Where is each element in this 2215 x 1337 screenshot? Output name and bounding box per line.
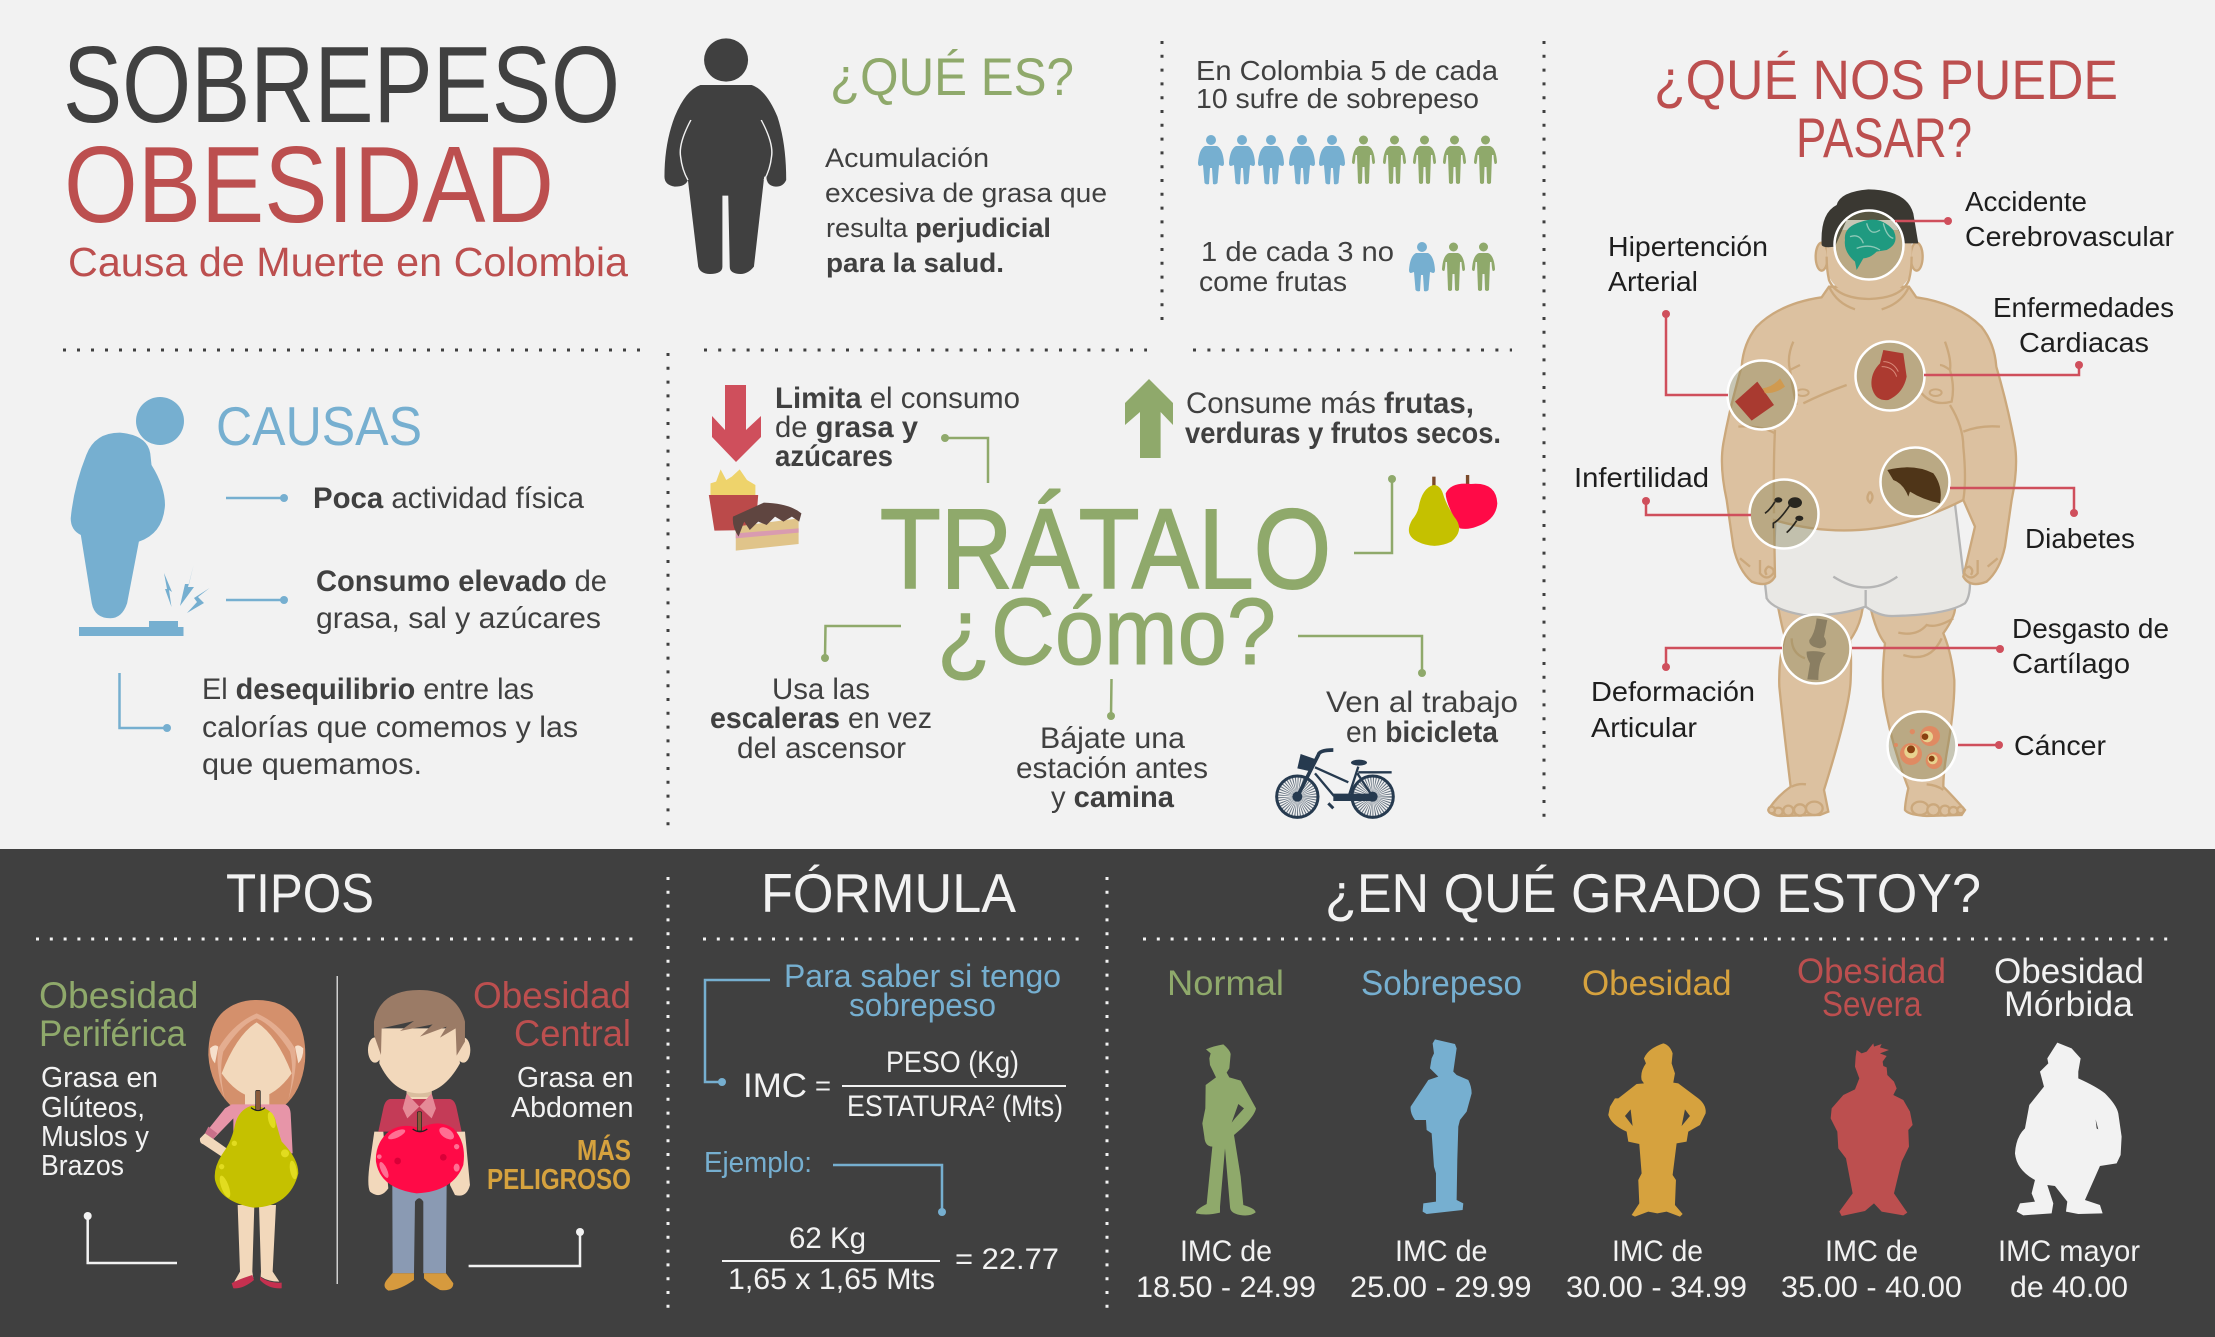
panel: formula: =: [815, 1070, 831, 1101]
panel: tratalo: y camina: [1051, 781, 1174, 814]
panel: formula: [704, 862, 1066, 1296]
lens: heart: [1856, 342, 1924, 410]
panel: tratalo: estación antes: [1016, 752, 1208, 785]
panel: formula: FÓRMULA: [761, 862, 1016, 924]
panel: tratalo: Usa las: [772, 673, 870, 706]
background: lower dark panel: [0, 849, 2215, 1337]
grade: obesidad: IMC de: [1612, 1235, 1703, 1268]
panel: causas: El desequilibrio entre las: [202, 673, 534, 706]
labels: conditions: Cerebrovascular: [1965, 221, 2174, 252]
panel: que nos puede pasar: ¿QUÉ NOS PUEDE: [1654, 48, 2118, 111]
labels: conditions: Enfermedades: [1993, 292, 2174, 323]
body figure: [1722, 189, 2016, 816]
panel: formula: Para saber si tengo: [784, 958, 1061, 994]
connectors: [821, 434, 1426, 720]
labels: conditions: Cáncer: [2014, 730, 2106, 761]
panel: formula: IMC: [743, 1067, 807, 1105]
panel: tipos: MÁS: [577, 1133, 631, 1167]
panel: tipos: Glúteos,: [41, 1092, 145, 1124]
panel: tipos: Grasa en: [41, 1062, 158, 1094]
icon: overweight person: [664, 38, 786, 274]
grade: normal: [1136, 964, 1316, 1304]
icon: fries and cake: [709, 469, 801, 551]
panel: statistics: 10 sufre de sobrepeso: [1196, 83, 1479, 114]
panel: tipos: TIPOS: [226, 862, 374, 924]
connectors: tipos: [84, 1212, 584, 1266]
grade: obesidad morbida: Mórbida: [2004, 985, 2134, 1024]
lens: liver: [1880, 448, 1950, 516]
grade: sobrepeso: 25.00 - 29.99: [1350, 1271, 1532, 1304]
panel: tipos: [39, 862, 634, 1291]
grade: obesidad: 30.00 - 34.99: [1566, 1271, 1747, 1304]
panel: tratalo: del ascensor: [737, 732, 906, 765]
panel: causas: CAUSAS: [216, 395, 422, 457]
panel: tipos: Periférica: [39, 1013, 186, 1054]
icon: woman with pear: [200, 1000, 305, 1288]
panel: tipos: PELIGROSO: [487, 1164, 631, 1196]
panel: tratalo: en bicicleta: [1346, 716, 1498, 749]
labels: conditions: Desgasto de: [2012, 613, 2169, 644]
panel: que es: resulta perjudicial: [826, 213, 1051, 243]
connectors: conditions: [1642, 217, 2083, 749]
panel: que es: excesiva de grasa que: [825, 178, 1107, 208]
panel: statistics: En Colombia 5 de cada: [1196, 55, 1498, 86]
title: Causa de Muerte en Colombia: [68, 239, 628, 285]
panel: tratalo: de grasa y: [775, 411, 918, 444]
lens: artery: [1728, 360, 1796, 430]
labels: conditions: Infertilidad: [1574, 462, 1709, 493]
panel: formula: 62 Kg: [789, 1222, 866, 1255]
panel: que nos puede pasar: PASAR?: [1796, 106, 1972, 169]
panel: que es: [825, 48, 1107, 278]
icon: pear and apple: [1409, 475, 1497, 546]
panel: tratalo: Consume más frutas,: [1186, 387, 1474, 420]
grade: normal: Normal: [1167, 964, 1284, 1003]
panel: statistics: [1196, 55, 1498, 297]
grade: obesidad morbida: Obesidad: [1994, 952, 2144, 991]
labels: conditions: Diabetes: [2025, 523, 2135, 554]
labels: conditions: Arterial: [1608, 266, 1698, 297]
grade: obesidad severa: IMC de: [1825, 1235, 1918, 1268]
icon: bicycle: [1277, 750, 1393, 817]
panel: formula: Ejemplo:: [704, 1147, 812, 1179]
panel: tipos: Central: [514, 1013, 631, 1054]
labels: conditions: Hipertención: [1608, 231, 1768, 262]
panel: tipos: Obesidad: [473, 975, 631, 1016]
lens: knee: [1782, 614, 1850, 684]
grade: obesidad: [1566, 964, 1747, 1304]
panel: formula: = 22.77: [955, 1243, 1059, 1276]
grade: obesidad severa: Obesidad: [1797, 952, 1946, 991]
panel: tratalo: Ven al trabajo: [1326, 686, 1518, 719]
labels: conditions: [1574, 186, 2174, 761]
grade: sobrepeso: Sobrepeso: [1361, 964, 1522, 1003]
panel: tipos: Obesidad: [39, 975, 198, 1016]
grade: obesidad morbida: [1994, 952, 2144, 1304]
lens: cancer: [1888, 712, 1956, 780]
panel: que nos puede pasar: [1574, 48, 2174, 816]
panel: en que grado estoy: [1136, 862, 2144, 1304]
panel: statistics: come frutas: [1199, 266, 1347, 297]
panel: formula: sobrepeso: [849, 987, 996, 1023]
panel: que es: Acumulación: [825, 143, 989, 173]
arrow: reduce: [712, 385, 761, 462]
panel: formula: 1,65 x 1,65 Mts: [728, 1263, 935, 1296]
labels: conditions: Articular: [1591, 712, 1697, 743]
panel: tratalo: TRÁTALO: [880, 486, 1331, 612]
panel: que es: para la salud.: [826, 248, 1004, 278]
grade: obesidad severa: Severa: [1822, 985, 1922, 1024]
panel: en que grado estoy: ¿EN QUÉ GRADO ESTOY?: [1325, 862, 1981, 924]
background: upper light panel: [0, 0, 2215, 849]
panel: formula: ESTATURA² (Mts): [847, 1090, 1063, 1123]
panel: tipos: Muslos y: [41, 1121, 149, 1153]
labels: conditions: Deformación: [1591, 676, 1755, 707]
panel: tratalo: Limita el consumo: [775, 382, 1020, 415]
grade: normal: 18.50 - 24.99: [1136, 1271, 1316, 1304]
panel: statistics: 1 de cada 3 no: [1201, 236, 1394, 267]
grade: obesidad: Obesidad: [1582, 964, 1732, 1003]
panel: formula: PESO (Kg): [886, 1046, 1019, 1079]
panel: causas: grasa, sal y azúcares: [316, 602, 601, 635]
connector: formula: [705, 980, 946, 1216]
panel: tipos: Brazos: [41, 1150, 124, 1182]
labels: conditions: Cartílago: [2012, 648, 2130, 679]
panel: causas: calorías que comemos y las: [202, 711, 578, 744]
panel: tratalo: Bájate una: [1040, 722, 1185, 755]
panel: tratalo: [709, 379, 1518, 817]
panel: causas: Poca actividad física: [313, 482, 584, 515]
panel: tipos: Grasa en: [517, 1062, 634, 1094]
arrow: increase: [1125, 379, 1173, 458]
grade: obesidad morbida: IMC mayor: [1998, 1235, 2140, 1268]
labels: conditions: Cardiacas: [2019, 327, 2149, 358]
panel: tipos: Abdomen: [511, 1092, 634, 1124]
grade: obesidad morbida: de 40.00: [2010, 1271, 2128, 1304]
panel: causas: que quemamos.: [202, 748, 422, 781]
lens: sperm: [1750, 480, 1818, 548]
panel: tratalo: azúcares: [775, 440, 893, 473]
grade: sobrepeso: IMC de: [1395, 1235, 1488, 1268]
panel: que es: ¿QUÉ ES?: [830, 48, 1074, 107]
lens: brain: [1834, 210, 1904, 280]
grade: obesidad severa: [1781, 952, 1962, 1304]
grade: sobrepeso: [1350, 964, 1532, 1304]
panel: tratalo: ¿Cómo?: [937, 579, 1276, 685]
title: [63, 24, 628, 285]
title: SOBREPESO: [63, 24, 620, 146]
panel: tratalo: escaleras en vez: [710, 702, 932, 735]
title: OBESIDAD: [64, 124, 554, 246]
labels: conditions: Accidente: [1965, 186, 2087, 217]
panel: causas: [71, 395, 607, 781]
grade: normal: IMC de: [1180, 1235, 1272, 1268]
icon: man with apple: [368, 990, 470, 1291]
panel: causas: Consumo elevado de: [316, 565, 607, 598]
grade: obesidad severa: 35.00 - 40.00: [1781, 1271, 1962, 1304]
panel: tratalo: verduras y frutos secos.: [1185, 417, 1501, 450]
icon: person on scale: [71, 397, 210, 636]
